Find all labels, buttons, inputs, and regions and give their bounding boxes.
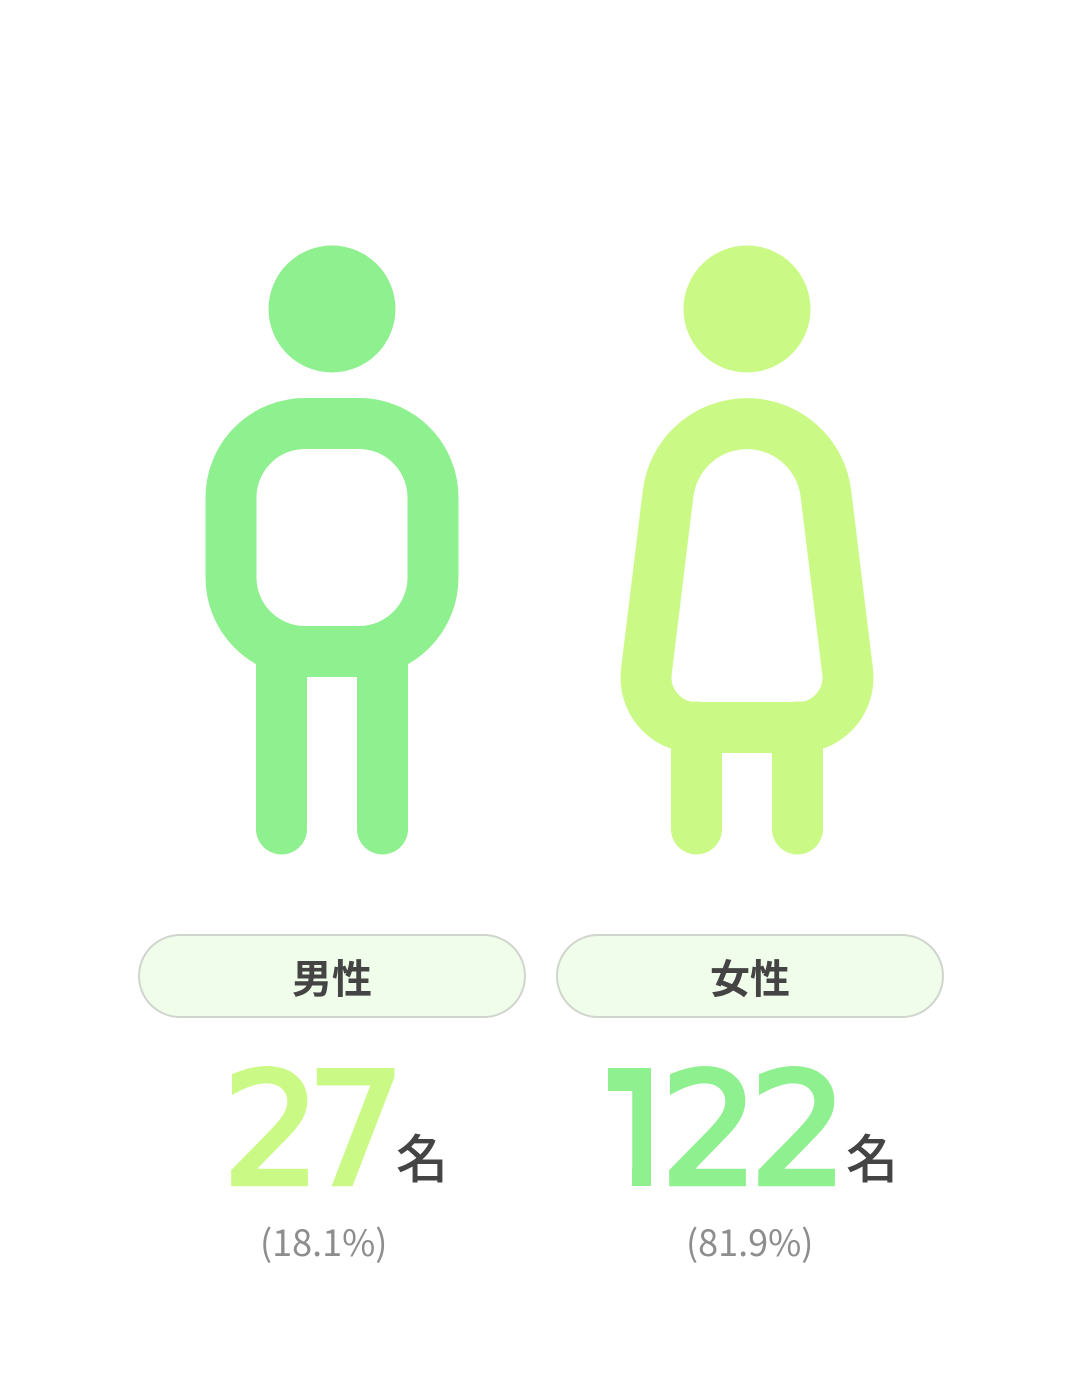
female count number: 1: [590, 1039, 689, 1221]
male count unit: 名: [396, 1118, 448, 1193]
male count number: 27: [222, 1039, 391, 1221]
female count number: 22: [660, 1039, 838, 1221]
female count unit: 名: [846, 1118, 898, 1193]
label: male: 男性: [292, 947, 372, 1005]
label: female: [556, 934, 944, 1018]
icon: male figure: [206, 246, 458, 854]
female percentage: (81.9%): [686, 1215, 813, 1267]
icon: female figure: [620, 246, 874, 854]
label: female: 女性: [710, 947, 790, 1005]
male percentage: (18.1%): [260, 1215, 387, 1267]
label: male: [138, 934, 526, 1018]
